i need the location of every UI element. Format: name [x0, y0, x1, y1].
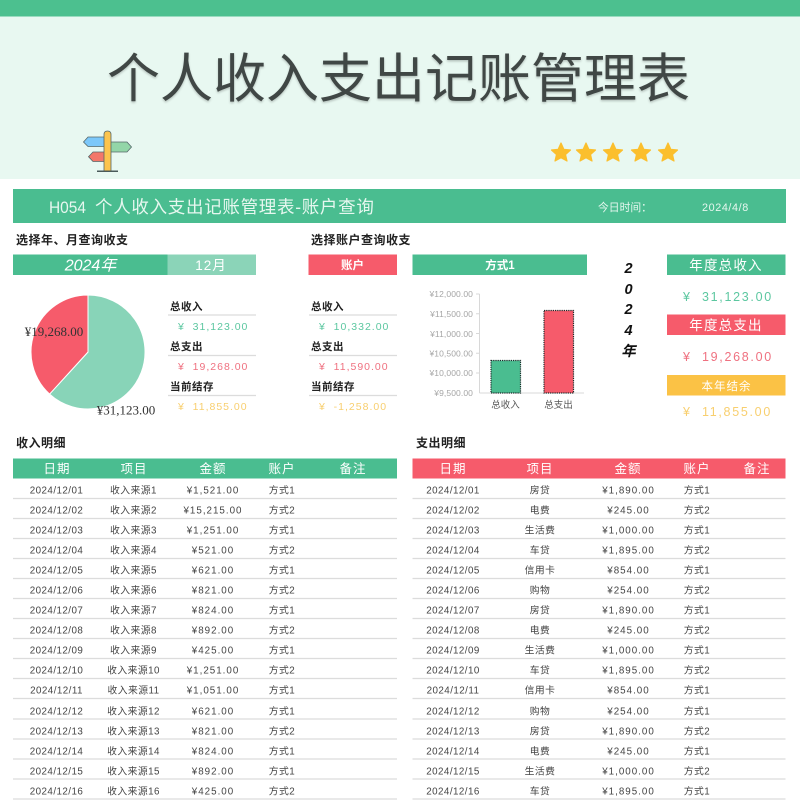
expense table header: 日期 [439, 462, 467, 476]
income row 8: ¥892.00 [191, 626, 234, 636]
expense row 1: 2024/12/01 [426, 486, 480, 496]
income row 1: 方式1 [269, 484, 295, 496]
account selector [308, 254, 397, 275]
income row 4: 方式2 [269, 544, 295, 556]
income row 15: ¥892.00 [191, 766, 234, 778]
expense row 3: 2024/12/03 [426, 526, 480, 536]
expense row 16 [412, 784, 786, 799]
card: annual balance [667, 375, 786, 419]
expense row 16: ¥1,895.00 [601, 786, 655, 798]
expense row 4: 方式2 [684, 544, 710, 556]
income row 9: 收入来源9 [110, 644, 157, 656]
expense row 7: 房贷 [530, 604, 550, 616]
income row 3 [13, 524, 397, 538]
expense row 9 [412, 644, 786, 658]
expense row 11: ¥854.00 [606, 686, 650, 696]
income row 14: 2024/12/14 [30, 746, 83, 758]
income row 2: 方式2 [269, 504, 295, 516]
method selector [412, 254, 587, 275]
card: annual expense: 年度总支出 [689, 318, 763, 333]
stats: year and month [168, 300, 256, 413]
vertical year label: 2 [623, 302, 633, 318]
expense row 14: 2024/12/14 [426, 746, 480, 758]
expense row 4: ¥1,895.00 [601, 546, 655, 556]
bar chart: 总支出 [544, 399, 573, 411]
income row 14: ¥824.00 [191, 746, 234, 758]
expense row 3: ¥1,000.00 [601, 526, 655, 536]
vertical year label: 4 [623, 323, 633, 339]
pie chart: ¥19,268.00 [25, 324, 83, 339]
dashboard banner [13, 189, 786, 223]
income row 7: 2024/12/07 [30, 606, 83, 616]
income table header [13, 458, 397, 478]
income row 6: 2024/12/06 [30, 586, 83, 596]
expense row 15: 方式2 [684, 764, 710, 778]
expense row 15: 2024/12/15 [426, 766, 480, 778]
expense row 14: ¥245.00 [606, 746, 650, 758]
income row 13: 收入来源13 [107, 724, 160, 738]
dashboard banner: 2024/4/8 [702, 202, 749, 214]
stats: account: 总支出 [311, 340, 344, 353]
expense row 6 [412, 584, 786, 598]
income row 2: 收入来源2 [110, 504, 157, 516]
expense row 10: 方式2 [684, 664, 710, 676]
income row 6: ¥821.00 [191, 586, 234, 596]
bar chart: ¥11,500.00 [429, 309, 473, 319]
expense table header: 账户 [683, 461, 711, 476]
income row 11 [13, 684, 397, 698]
income row 4: ¥521.00 [191, 546, 234, 556]
income table header: 备注 [339, 461, 367, 476]
income row 2: ¥15,215.00 [182, 506, 243, 516]
expense row 2 [412, 504, 786, 518]
income row 6: 收入来源6 [110, 584, 157, 596]
bar chart: 总收入 [491, 399, 520, 411]
expense row 16: 车贷 [530, 784, 550, 798]
icon: signpost [84, 131, 132, 172]
income row 3: 2024/12/03 [30, 526, 83, 536]
income row 16 [13, 784, 397, 799]
expense table header: 项目 [526, 462, 554, 476]
expense row 9: 生活费 [525, 644, 555, 656]
expense row 6: 方式2 [684, 584, 710, 596]
expense row 8: 电费 [530, 624, 550, 636]
expense row 9: ¥1,000.00 [601, 646, 655, 656]
income row 10: ¥1,251.00 [186, 666, 239, 676]
dashboard banner: H054 [49, 198, 86, 217]
card: annual balance: 本年结余 [702, 379, 752, 393]
method selector: 方式1 [485, 258, 515, 272]
expense row 13: 方式2 [684, 724, 710, 738]
pie chart [25, 295, 155, 418]
income row 13: ¥821.00 [191, 726, 234, 738]
expense row 10 [412, 664, 786, 678]
title: 个人收入支出记账管理表 [107, 50, 690, 109]
expense row 9: 方式1 [684, 644, 710, 656]
income row 16: 2024/12/16 [30, 786, 83, 798]
expense row 12: 方式1 [684, 704, 710, 718]
expense row 13: 2024/12/13 [426, 726, 480, 738]
income row 2 [13, 504, 397, 518]
income row 3: 方式1 [269, 524, 295, 536]
bar chart: ¥10,000.00 [428, 368, 473, 378]
income row 7: 方式1 [269, 604, 295, 616]
stats: year and month: 总收入 [170, 300, 203, 313]
income row 9: ¥425.00 [191, 646, 234, 656]
income row 7 [13, 604, 397, 618]
stats: account: ¥ -1,258.00 [318, 401, 387, 413]
income row 8: 方式2 [269, 624, 295, 636]
dashboard banner: 个人收入支出记账管理表-账户查询 [95, 197, 375, 217]
expense row 3 [412, 524, 786, 538]
expense row 8: 方式2 [684, 624, 710, 636]
income table header: 金额 [199, 461, 227, 476]
income row 5: 方式1 [269, 564, 295, 576]
income table header: 账户 [268, 461, 296, 476]
year selector [13, 254, 168, 275]
expense row 10: ¥1,895.00 [601, 666, 655, 676]
income row 12: 收入来源12 [107, 704, 160, 718]
income row 4 [13, 544, 397, 558]
expense row 6: 购物 [530, 584, 550, 596]
income row 11: ¥1,051.00 [186, 686, 239, 696]
expense row 5: 2024/12/05 [426, 566, 480, 576]
income row 5: ¥621.00 [191, 566, 234, 576]
table: expense details [412, 458, 786, 799]
income row 16: 方式2 [269, 784, 295, 798]
expense row 11: 方式1 [684, 684, 710, 696]
income row 13: 2024/12/13 [30, 726, 83, 738]
income row 10: 收入来源10 [107, 664, 160, 676]
card: annual income: 年度总收入 [689, 258, 763, 273]
income row 1: 收入来源1 [110, 484, 157, 496]
heading: year and month query: 选择年、月查询收支 [16, 232, 129, 247]
income row 10: 2024/12/10 [30, 666, 83, 676]
expense row 9: 2024/12/09 [426, 646, 480, 656]
bar chart: ¥11,000.00 [429, 329, 473, 339]
expense row 2: 2024/12/02 [426, 506, 480, 516]
income row 11: 2024/12/11 [30, 686, 83, 696]
expense row 13 [412, 724, 786, 739]
vertical year label: 0 [624, 282, 633, 298]
stats: account: ¥ 10,332.00 [318, 321, 389, 333]
account selector: 账户 [341, 258, 364, 272]
stats: year and month: 当前结存 [170, 380, 214, 393]
bar chart: ¥9,500.00 [433, 388, 473, 398]
expense table header: 金额 [614, 461, 642, 476]
income row 11: 收入来源11 [107, 684, 160, 696]
header band [0, 0, 800, 179]
income row 1 [13, 484, 397, 498]
expense row 1: 方式1 [684, 484, 710, 496]
income row 16: 收入来源16 [107, 784, 160, 798]
heading: income details: 收入明细 [16, 435, 66, 450]
expense row 12: ¥254.00 [606, 706, 650, 718]
income table header: 日期 [43, 462, 71, 476]
expense row 6: 2024/12/06 [426, 586, 480, 596]
expense row 12 [412, 704, 786, 719]
expense row 7: 2024/12/07 [426, 606, 480, 616]
income row 4: 收入来源4 [110, 544, 157, 556]
income row 7: ¥824.00 [191, 606, 234, 616]
income row 8 [13, 624, 397, 638]
income row 3: ¥1,251.00 [186, 526, 239, 536]
heading: account query: 选择账户查询收支 [311, 232, 411, 247]
income row 15: 收入来源15 [107, 764, 160, 778]
income row 15: 2024/12/15 [30, 766, 83, 778]
income row 13: 方式2 [269, 724, 295, 738]
expense row 13: 房贷 [530, 724, 550, 738]
expense row 16: 2024/12/16 [426, 786, 480, 798]
expense row 7: 方式1 [684, 604, 710, 616]
expense row 12: 购物 [530, 704, 550, 718]
income row 12 [13, 704, 397, 719]
expense row 4 [412, 544, 786, 558]
heading: expense details: 支出明细 [416, 435, 466, 450]
month selector [168, 254, 256, 275]
expense row 7: ¥1,890.00 [601, 606, 655, 616]
income row 6 [13, 584, 397, 598]
expense row 5: 方式1 [684, 564, 710, 576]
income row 15: 方式1 [269, 764, 295, 778]
income row 14 [13, 744, 397, 759]
expense row 12: 2024/12/12 [426, 706, 480, 718]
income row 5 [13, 564, 397, 578]
expense row 14 [412, 744, 786, 759]
expense row 1: 房贷 [530, 484, 550, 496]
expense row 8: ¥245.00 [606, 626, 650, 636]
expense row 8 [412, 624, 786, 638]
income row 13 [13, 724, 397, 739]
expense row 15 [412, 764, 786, 779]
bar chart [428, 289, 584, 411]
month selector: 12月 [195, 258, 227, 273]
stats: year and month: ¥ 19,268.00 [177, 361, 248, 373]
income row 12: 方式1 [269, 704, 295, 718]
bar chart: ¥10,500.00 [428, 348, 473, 358]
expense row 13: ¥1,890.00 [601, 726, 655, 738]
income row 5: 收入来源5 [110, 564, 157, 576]
card: annual expense: ¥ 19,268.00 [682, 350, 773, 364]
income row 12: ¥621.00 [191, 706, 234, 718]
expense row 2: 电费 [530, 504, 550, 516]
income row 7: 收入来源7 [110, 604, 157, 616]
expense row 15: 生活费 [525, 764, 555, 778]
year selector: 2024年 [64, 256, 118, 274]
expense row 8: 2024/12/08 [426, 626, 480, 636]
income row 9 [13, 644, 397, 658]
income row 5: 2024/12/05 [30, 566, 83, 576]
income row 1: ¥1,521.00 [186, 486, 239, 496]
dashboard banner: 今日时间： [598, 200, 652, 214]
income row 2: 2024/12/02 [30, 506, 83, 516]
expense row 15: ¥1,000.00 [601, 766, 655, 778]
card: annual balance: ¥ 11,855.00 [682, 405, 772, 419]
income row 9: 2024/12/09 [30, 646, 83, 656]
income row 11: 方式1 [269, 684, 295, 696]
expense row 16: 方式1 [684, 784, 710, 798]
expense row 1: ¥1,890.00 [601, 486, 655, 496]
table: income details [13, 458, 397, 799]
stats: account: 总收入 [311, 300, 344, 313]
expense row 14: 电费 [530, 744, 550, 758]
income row 15 [13, 764, 397, 779]
expense row 10: 车贷 [530, 664, 550, 676]
income row 14: 方式1 [269, 744, 295, 758]
card: annual expense [667, 314, 786, 364]
expense row 5: ¥854.00 [606, 566, 650, 576]
income row 9: 方式1 [269, 644, 295, 656]
stats: account: ¥ 11,590.00 [318, 361, 389, 373]
vertical year label: 2 [623, 261, 633, 277]
stats: year and month: ¥ 11,855.00 [177, 401, 248, 413]
rating stars [552, 143, 678, 161]
expense row 4: 车贷 [530, 544, 550, 556]
vertical year label: 年 [621, 343, 637, 360]
expense row 11: 信用卡 [525, 684, 555, 696]
expense row 14: 方式1 [684, 744, 710, 758]
card: annual income: ¥ 31,123.00 [682, 290, 773, 304]
income row 6: 方式2 [269, 584, 295, 596]
stats: year and month: 总支出 [170, 340, 203, 353]
stats: year and month: ¥ 31,123.00 [177, 321, 248, 333]
expense row 6: ¥254.00 [606, 586, 650, 596]
income row 8: 2024/12/08 [30, 626, 83, 636]
stats: account: 当前结存 [311, 380, 355, 393]
income row 1: 2024/12/01 [30, 486, 83, 496]
expense row 10: 2024/12/10 [426, 666, 480, 676]
expense row 11 [412, 684, 786, 698]
vertical year label [621, 261, 637, 360]
expense row 3: 方式1 [684, 524, 710, 536]
expense row 2: 方式2 [684, 504, 710, 516]
expense row 11: 2024/12/11 [427, 686, 479, 696]
income row 4: 2024/12/04 [30, 546, 83, 556]
income row 10: 方式2 [269, 664, 295, 676]
expense row 5: 信用卡 [525, 564, 555, 576]
expense row 5 [412, 564, 786, 578]
income row 12: 2024/12/12 [30, 706, 83, 718]
stats: account [309, 300, 397, 413]
income row 3: 收入来源3 [110, 524, 157, 536]
card: annual income [667, 254, 786, 304]
expense row 4: 2024/12/04 [426, 546, 480, 556]
income row 16: ¥425.00 [191, 786, 234, 798]
bar chart: ¥12,000.00 [428, 289, 473, 299]
income row 10 [13, 664, 397, 678]
income row 8: 收入来源8 [110, 624, 157, 636]
expense row 7 [412, 604, 786, 618]
expense table header [412, 458, 786, 478]
income row 14: 收入来源14 [107, 744, 160, 758]
expense table header: 备注 [743, 461, 771, 476]
pie chart: ¥31,123.00 [97, 402, 155, 418]
expense row 2: ¥245.00 [606, 506, 650, 516]
income table header: 项目 [120, 462, 148, 476]
expense row 3: 生活费 [525, 524, 555, 536]
expense row 1 [412, 484, 786, 498]
